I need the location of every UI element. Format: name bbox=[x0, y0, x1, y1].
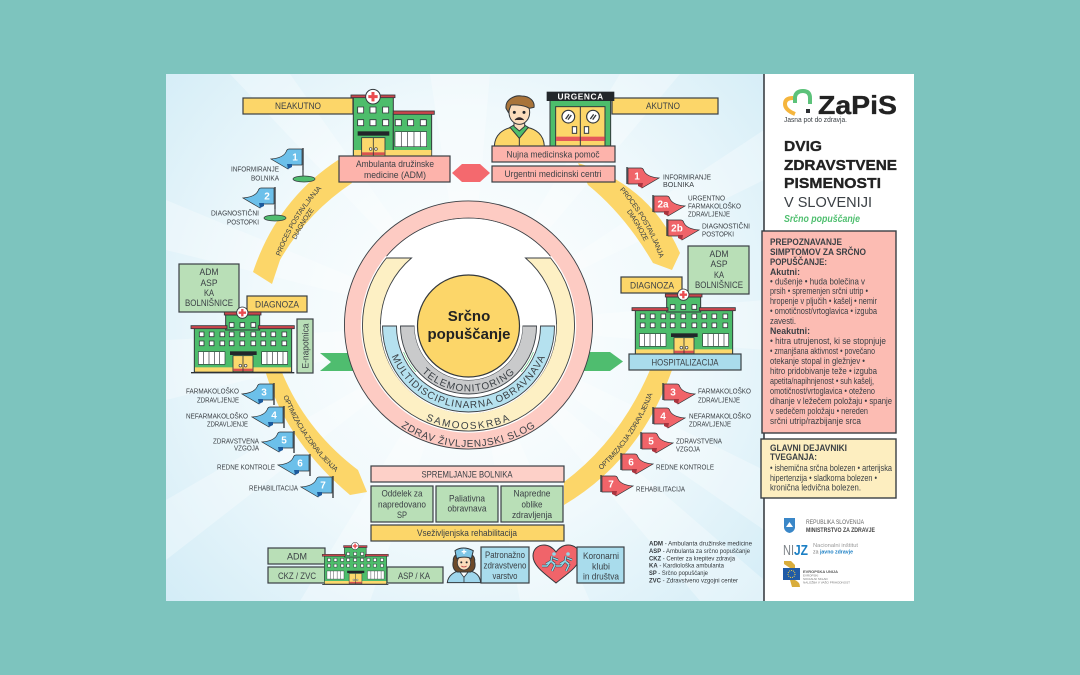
main diagram background with rays bbox=[166, 74, 764, 601]
icon: nurse bbox=[447, 548, 481, 583]
legend of abbreviations bbox=[649, 540, 752, 584]
flag 3 blue with label: FARMAKOLOŠKO bbox=[186, 386, 239, 396]
flag 5 blue with label bbox=[213, 431, 294, 453]
box: patronažno zdravstveno varstvo: Patronažno bbox=[485, 550, 525, 561]
logo: ZaPiS bbox=[784, 90, 897, 124]
flag 1 red with label: BOLNIKA bbox=[663, 180, 694, 189]
panel: risk factors: kronična ledvična bolezen. bbox=[770, 482, 861, 492]
logo: nijz: NI bbox=[783, 542, 794, 559]
logo: european union: EVROPSKI bbox=[803, 574, 819, 578]
panel: symptoms: • hitra utrujenost, ki se stopnjuje bbox=[770, 336, 886, 346]
arc label: optimizacija zdravljenja right: OPTIMIZACIJA ZDRAVLJENJA bbox=[599, 394, 652, 469]
ring label: telemonitoring: TELEMONITORING bbox=[424, 367, 514, 392]
flag 2a red with label: 2a bbox=[657, 200, 669, 210]
legend of abbreviations: CKZ - Center za krepitev zdravja bbox=[649, 556, 735, 562]
icon: hospital right bbox=[632, 289, 735, 355]
flag 2 blue with label: POSTOPKI bbox=[227, 218, 259, 226]
flag 2a red with label: ZDRAVLJENJE bbox=[688, 210, 730, 218]
flag 5 red with label: 5 bbox=[648, 436, 654, 448]
box: paliativna obravnava: Paliativna bbox=[449, 494, 486, 504]
flag 4 blue with label bbox=[186, 406, 284, 428]
box: ckz zvc bbox=[268, 567, 325, 583]
flag 4 red with label bbox=[653, 407, 751, 428]
flag 4 red with label: 4 bbox=[660, 412, 666, 422]
title: Srčno popuščanje bbox=[784, 214, 860, 225]
flag 4 blue with label: 4 bbox=[271, 410, 277, 422]
flag 1 red with label: INFORMIRANJE bbox=[663, 172, 711, 182]
flag 3 red with label bbox=[663, 383, 751, 404]
box: koronarni klubi in društva bbox=[577, 547, 624, 583]
box: adm bottom: ADM bbox=[287, 552, 307, 562]
logo: ZaPiS: ZaPiS bbox=[818, 90, 897, 120]
legend of abbreviations: ADM - Ambulanta družinske medicine bbox=[649, 540, 752, 548]
yellow arc: health optimisation left bbox=[265, 370, 367, 495]
logo: nijz bbox=[783, 542, 858, 559]
panel: symptoms: srčni utrip/razbijanje srca bbox=[770, 416, 861, 426]
flag 6 blue with label bbox=[217, 454, 310, 476]
box: ambulanta družinske medicine: medicine (ADM) bbox=[364, 170, 426, 181]
flag 3 blue with label: 3 bbox=[261, 388, 267, 398]
box: adm asp ka bolnišnice left: BOLNIŠNICE bbox=[185, 298, 233, 309]
panel: risk factors: GLAVNI DEJAVNIKI bbox=[770, 443, 847, 453]
arc label: proces postavljanja diagnoze left: DIAGNOZE bbox=[292, 208, 314, 240]
box: adm asp ka bolnišnice right: ADM bbox=[710, 249, 729, 260]
box: spremljanje bolnika bbox=[371, 466, 564, 482]
box: e-napotnica bbox=[297, 319, 313, 373]
box: e-napotnica: E-napotnica bbox=[300, 323, 312, 368]
arc label: optimizacija zdravljenja left: OPTIMIZACIJA ZDRAVLJENJA bbox=[284, 396, 338, 472]
panel: symptoms: otekanje stopal in gležnjev • bbox=[770, 356, 865, 366]
panel: risk factors bbox=[761, 439, 896, 498]
box: oddelek za napredovano SP bbox=[371, 486, 433, 522]
box: nujna medicinska pomoč: Nujna medicinska pomoč bbox=[506, 150, 600, 160]
box: napredne oblike zdravljenja: oblike bbox=[522, 500, 542, 510]
flag 2b red with label bbox=[667, 219, 750, 240]
flag 5 blue with label: VZGOJA bbox=[234, 444, 259, 452]
title: DVIG bbox=[784, 138, 822, 155]
title: V SLOVENIJI bbox=[784, 194, 872, 211]
box: adm bottom bbox=[268, 548, 325, 564]
label: akutno: AKUTNO bbox=[646, 101, 680, 112]
ring label: multidisciplinarna obravnava: MULTIDISCIPLINARNA OBRAVNAVA bbox=[392, 354, 545, 408]
flag 7 blue with label bbox=[249, 476, 333, 498]
box: paliativna obravnava bbox=[436, 486, 498, 522]
box: adm asp ka bolnišnice left bbox=[179, 264, 239, 312]
flag 3 red with label: ZDRAVLJENJE bbox=[698, 396, 740, 404]
label: neakutno: NEAKUTNO bbox=[275, 101, 321, 112]
flag 7 blue with label: REHABILITACIJA bbox=[249, 484, 298, 492]
logo: european union bbox=[783, 561, 850, 587]
logo: nijz: Nacionalni inštitut bbox=[813, 543, 858, 549]
flag 1 red with label bbox=[627, 167, 711, 189]
logo: republika slovenija ministrstvo za zdravje: REPUBLIKA SLOVENIJA bbox=[806, 519, 865, 526]
box: hospitalizacija: HOSPITALIZACIJA bbox=[652, 358, 719, 368]
logo: republika slovenija ministrstvo za zdravje bbox=[784, 518, 876, 534]
panel: symptoms: apetita/napihnjenost • suh kašelj, bbox=[770, 376, 874, 386]
box: patronažno zdravstveno varstvo: zdravstveno bbox=[484, 560, 526, 572]
box: oddelek za napredovano SP: Oddelek za bbox=[382, 488, 423, 500]
box: hospitalizacija bbox=[629, 354, 741, 370]
flag 3 blue with label bbox=[186, 383, 274, 405]
arc label: proces postavljanja diagnoze right: PROCES POSTAVLJANJA bbox=[620, 187, 664, 258]
panel: symptoms: • dušenje • huda bolečina v bbox=[770, 276, 865, 286]
panel: risk factors: hipertenzija • sladkorna bolezen • bbox=[770, 473, 877, 483]
box: ckz zvc: CKZ / ZVC bbox=[278, 571, 316, 582]
panel: symptoms: Neakutni: bbox=[770, 326, 810, 336]
flag 2a red with label bbox=[653, 194, 741, 218]
flag 7 red with label: REHABILITACIJA bbox=[636, 484, 685, 494]
panel: symptoms: POPUŠČANJE: bbox=[770, 256, 827, 267]
green arrow right bbox=[575, 352, 623, 371]
panel: symptoms: dihanje v ležečem položaju • spanje bbox=[770, 396, 892, 406]
logo: european union: EVROPSKA UNIJA bbox=[803, 570, 839, 574]
box: adm asp ka bolnišnice left: KA bbox=[204, 288, 215, 299]
label: diagnoza right: DIAGNOZA bbox=[630, 280, 675, 292]
flag 1 blue with label: 1 bbox=[292, 152, 298, 164]
circle: srčno popuščanje bbox=[414, 272, 522, 380]
title bbox=[784, 138, 897, 225]
logo: nijz: za javno zdravje bbox=[813, 550, 853, 556]
ring: zdrav življenjski slog bbox=[353, 210, 584, 440]
flag 5 red with label: ZDRAVSTVENA bbox=[676, 436, 722, 446]
yellow arc: health optimisation right bbox=[564, 370, 672, 505]
panel: symptoms: • zmanjšana aktivnost • povečano bbox=[770, 346, 875, 356]
circle: srčno popuščanje: Srčno bbox=[448, 308, 490, 325]
flag 1 blue with label: INFORMIRANJE bbox=[231, 164, 279, 174]
flag 5 red with label: VZGOJA bbox=[676, 444, 700, 454]
label: akutno bbox=[612, 98, 718, 114]
legend of abbreviations: ASP - Ambulanta za srčno popuščanje bbox=[649, 548, 750, 555]
box: koronarni klubi in društva: Koronarni bbox=[583, 551, 619, 562]
label: diagnoza left: DIAGNOZA bbox=[255, 300, 300, 310]
box: adm asp ka bolnišnice left: ASP bbox=[200, 278, 218, 289]
circle: srčno popuščanje: popuščanje bbox=[428, 326, 510, 343]
box: ambulanta družinske medicine bbox=[339, 156, 450, 182]
ring: multidisciplinarna obravnava bbox=[382, 326, 554, 412]
box: adm asp ka bolnišnice right bbox=[688, 246, 749, 294]
box: urgentni medicinski centri bbox=[492, 166, 615, 182]
flag 4 blue with label: NEFARMAKOLOŠKO bbox=[186, 412, 248, 420]
logo: nijz: JZ bbox=[794, 542, 808, 559]
title: ZDRAVSTVENE bbox=[784, 157, 897, 174]
label: diagnoza left bbox=[247, 296, 307, 312]
flag 7 blue with label: 7 bbox=[320, 480, 326, 492]
flag 1 blue with label: BOLNIKA bbox=[251, 174, 279, 182]
flag 2b red with label: POSTOPKI bbox=[702, 230, 734, 238]
icon: emergency entrance bbox=[547, 92, 614, 146]
panel: symptoms bbox=[762, 231, 896, 433]
yellow arc: diagnosis process right bbox=[578, 163, 680, 270]
panel: symptoms: hropenje v pljučih • kašelj • nemir bbox=[770, 296, 877, 306]
box: paliativna obravnava: obravnava bbox=[448, 504, 487, 514]
logo: european union: NALOŽBA V VAŠO PRIHODNOST bbox=[803, 580, 850, 584]
icon: clinic building bbox=[351, 89, 434, 156]
flag 4 red with label: NEFARMAKOLOŠKO bbox=[689, 412, 751, 420]
flag 4 red with label: ZDRAVLJENJE bbox=[689, 420, 731, 428]
icon: hospital left bbox=[191, 307, 294, 373]
yellow arc: diagnosis process left bbox=[253, 160, 352, 284]
logo: republika slovenija ministrstvo za zdravje: MINISTRSTVO ZA ZDRAVJE bbox=[806, 527, 876, 534]
box: koronarni klubi in društva: in društva bbox=[583, 572, 620, 582]
logo: ZaPiS: Jasna pot do zdravja. bbox=[784, 117, 847, 124]
legend of abbreviations: KA - Kardiološka ambulanta bbox=[649, 562, 724, 570]
panel: symptoms: SIMPTOMOV ZA SRČNO bbox=[770, 246, 866, 257]
label: diagnoza right bbox=[621, 277, 682, 293]
icon: emergency entrance: URGENCA bbox=[557, 92, 603, 102]
flag 1 red with label: 1 bbox=[634, 172, 640, 182]
arc label: proces postavljanja diagnoze right: DIAGNOZE bbox=[627, 209, 648, 242]
legend of abbreviations: SP - Srčno popuščanje bbox=[649, 570, 708, 577]
flag 7 red with label bbox=[601, 475, 685, 496]
box: patronažno zdravstveno varstvo bbox=[481, 547, 529, 583]
icon: heart with runners bbox=[533, 545, 580, 583]
flag 6 red with label: 6 bbox=[628, 458, 634, 468]
box: vseživljenjska rehabilitacija bbox=[371, 525, 564, 541]
panel: symptoms: omotičnost/vrtoglavica • oteženo bbox=[770, 386, 875, 396]
flag 6 blue with label: REDNE KONTROLE bbox=[217, 462, 275, 472]
flag 6 blue with label: 6 bbox=[297, 458, 303, 470]
flag 2a red with label: FARMAKOLOŠKO bbox=[688, 202, 741, 210]
poster sheet bbox=[166, 74, 914, 601]
box: adm asp ka bolnišnice right: KA bbox=[714, 270, 725, 281]
flag 6 red with label bbox=[621, 453, 714, 474]
ring label: samooskrba: SAMOOSKRBA bbox=[426, 414, 510, 430]
ring: samooskrba bbox=[362, 258, 574, 431]
flag 2b red with label: DIAGNOSTIČNI bbox=[702, 222, 750, 230]
box: spremljanje bolnika: SPREMLJANJE BOLNIKA bbox=[422, 470, 513, 480]
arc label: proces postavljanja diagnoze left: PROCES POSTAVLJANJA bbox=[276, 186, 322, 256]
box: urgentni medicinski centri: Urgentni medicinski centri bbox=[504, 169, 602, 180]
sidebar panel bbox=[764, 74, 914, 601]
double arrow between clinic and emergency bbox=[452, 164, 490, 182]
title: PISMENOSTI bbox=[784, 175, 881, 192]
panel: symptoms: PREPOZNAVANJE bbox=[770, 237, 842, 247]
box: vseživljenjska rehabilitacija: Vseživljenjska rehabilitacija bbox=[417, 528, 518, 539]
flag 5 blue with label: 5 bbox=[281, 436, 287, 446]
box: patronažno zdravstveno varstvo: varstvo bbox=[492, 571, 518, 582]
box: adm asp ka bolnišnice left: ADM bbox=[200, 267, 219, 278]
ring: telemonitoring bbox=[400, 326, 536, 394]
flag 2a red with label: URGENTNO bbox=[688, 194, 725, 202]
box: ambulanta družinske medicine: Ambulanta družinske bbox=[356, 159, 434, 170]
flag 1 blue with label bbox=[231, 148, 315, 182]
box: napredne oblike zdravljenja: zdravljenja bbox=[512, 510, 553, 521]
panel: symptoms: Akutni: bbox=[770, 267, 800, 277]
panel: symptoms: • omotičnost/vrtoglavica • izguba bbox=[770, 306, 877, 316]
box: nujna medicinska pomoč bbox=[492, 146, 615, 162]
box: oddelek za napredovano SP: SP bbox=[397, 510, 407, 521]
flag 3 red with label: 3 bbox=[670, 388, 676, 398]
flag 4 blue with label: ZDRAVLJENJE bbox=[207, 420, 248, 428]
box: asp ka: ASP / KA bbox=[398, 571, 431, 582]
panel: symptoms: prsih • spremenjen srčni utrip • bbox=[770, 286, 868, 296]
panel: symptoms: v sedečem položaju • nereden bbox=[770, 406, 868, 416]
flag 3 blue with label: ZDRAVLJENJE bbox=[197, 396, 239, 404]
box: oddelek za napredovano SP: napredovano bbox=[378, 500, 426, 510]
central ring diagram bbox=[344, 200, 593, 450]
panel: risk factors: TVEGANJA: bbox=[770, 452, 817, 462]
box: koronarni klubi in društva: klubi bbox=[592, 562, 610, 572]
box: asp ka bbox=[387, 567, 443, 583]
label: neakutno bbox=[243, 98, 353, 114]
flag 7 red with label: 7 bbox=[608, 480, 614, 490]
flag 2b red with label: 2b bbox=[671, 224, 683, 234]
logo: european union: SOCIALNI SKLAD bbox=[803, 577, 829, 581]
flag 3 red with label: FARMAKOLOŠKO bbox=[698, 386, 751, 396]
flag 5 blue with label: ZDRAVSTVENA bbox=[213, 436, 259, 446]
box: napredne oblike zdravljenja bbox=[501, 486, 563, 522]
box: adm asp ka bolnišnice right: ASP bbox=[710, 259, 728, 270]
panel: symptoms: hitro pridobivanje teže • izguba bbox=[770, 366, 877, 376]
legend of abbreviations: ZVC - Zdravstveno vzgojni center bbox=[649, 578, 739, 584]
flag 2 blue with label: DIAGNOSTIČNI bbox=[211, 208, 259, 218]
box: napredne oblike zdravljenja: Napredne bbox=[514, 488, 550, 500]
panel: symptoms: zavesti. bbox=[770, 316, 796, 326]
flag 5 red with label bbox=[641, 432, 722, 454]
icon: worried patient bbox=[494, 96, 544, 146]
flag 2 blue with label bbox=[211, 187, 286, 226]
green arrow left bbox=[320, 353, 360, 371]
panel: risk factors: • ishemična srčna bolezen • arterijska bbox=[770, 463, 892, 473]
flag 6 red with label: REDNE KONTROLE bbox=[656, 462, 714, 472]
box: adm asp ka bolnišnice right: BOLNIŠNICE bbox=[695, 280, 743, 291]
ring label: zdrav življenjski slog: ZDRAV ŽIVLJENJSKI SLOG bbox=[401, 421, 534, 447]
flag 2 blue with label: 2 bbox=[264, 192, 270, 202]
icon: small hospital bottom bbox=[322, 542, 388, 584]
